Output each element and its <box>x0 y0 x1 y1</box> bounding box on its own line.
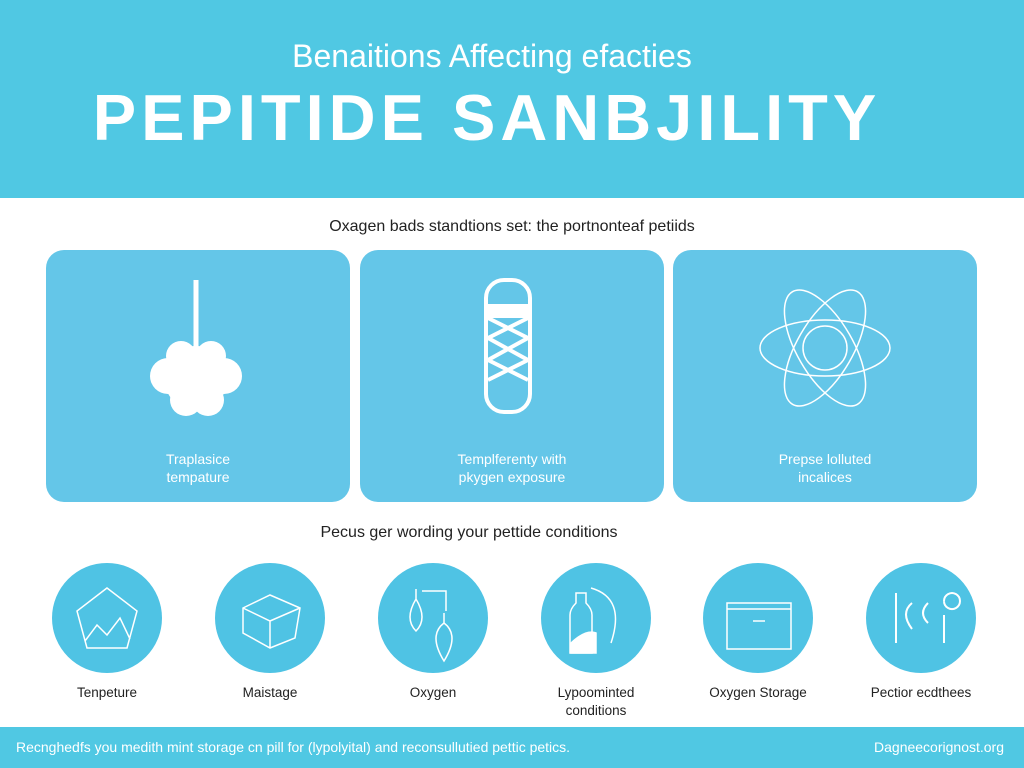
card: temperature <box>46 250 350 502</box>
icon circle: oxygen <box>378 563 488 673</box>
footer <box>0 727 1024 768</box>
header banner <box>0 0 1024 198</box>
card: polluted: Prepse lolluted <box>779 451 871 467</box>
icon circle: moisture <box>215 563 325 673</box>
icon: tube <box>484 278 532 414</box>
icon: cloud on stick <box>150 280 242 416</box>
footer: Dagneecorignost.org <box>874 739 1004 755</box>
subtitle: Benaitions Affecting efacties <box>292 38 692 74</box>
text: Lypoominted <box>558 685 634 700</box>
card: oxygen exposure: Templferenty with <box>458 451 566 467</box>
label row <box>77 685 971 718</box>
footer: Recnghedfs you medith mint storage cn pill for (lypolyital) and reconsullutied pettic petics. <box>16 739 570 755</box>
card: oxygen exposure: pkygen exposure <box>459 469 565 485</box>
icon circle: temperature <box>52 563 162 673</box>
icon: atom rings <box>759 289 891 407</box>
text: Maistage <box>243 685 297 700</box>
card: oxygen exposure <box>360 250 664 502</box>
icon circle: lyophilized <box>541 563 651 673</box>
text: conditions <box>566 703 626 718</box>
section heading 1: Oxagen bads standtions set: the portnonteaf petiids <box>329 218 695 235</box>
main title: PEPITIDE SANBJILITY <box>93 81 881 154</box>
text: Oxygen Storage <box>709 685 807 700</box>
text: Tenpeture <box>77 685 137 700</box>
text: Pectior ecdthees <box>871 685 971 700</box>
text: Oxygen <box>410 685 456 700</box>
card: polluted: incalices <box>798 469 852 485</box>
icon circle: oxygen storage <box>703 563 813 673</box>
section heading 2: Pecus ger wording your pettide conditions <box>320 524 618 541</box>
icon circle: peptide <box>866 563 976 673</box>
card: temperature: tempature <box>166 469 230 485</box>
card: temperature: Traplasice <box>166 451 230 467</box>
card: polluted <box>673 250 977 502</box>
